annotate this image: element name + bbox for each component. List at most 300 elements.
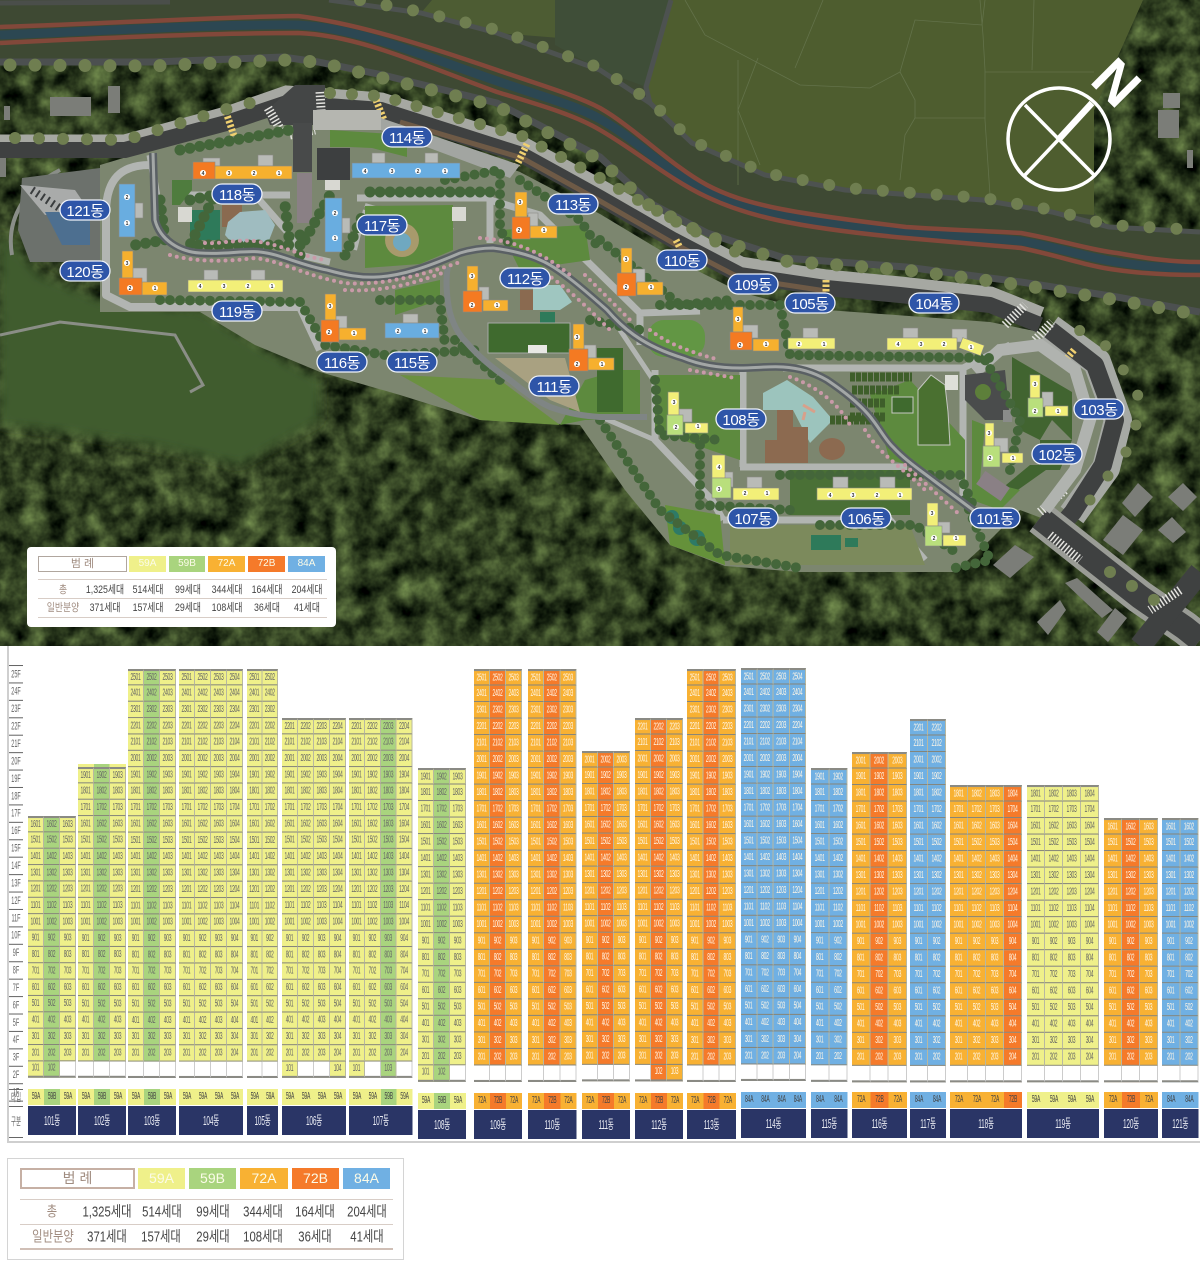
unit stack 111: 403 xyxy=(618,1017,625,1028)
unit stack 101: 1402 xyxy=(46,850,57,862)
unit stack 110: 2203 xyxy=(563,720,573,731)
unit stack 106: 303 xyxy=(318,1030,325,1042)
type and name 110동 xyxy=(528,1093,576,1139)
unit stack 112: 1001 xyxy=(637,918,648,929)
unit stack 104: 204 xyxy=(231,1047,238,1058)
unit stack 118: 601 xyxy=(955,985,962,996)
unit stack 114: 1603 xyxy=(776,818,786,830)
building 105 xyxy=(788,328,835,349)
unit stack 114: 2502 xyxy=(760,671,770,682)
unit stack 116: 1503 xyxy=(892,836,902,848)
unit stack 119: 601 xyxy=(1032,985,1039,996)
unit stack 111: 1403 xyxy=(616,852,627,863)
unit stack 115: 202 xyxy=(834,1050,842,1062)
unit stack 103: 2501 xyxy=(130,672,141,683)
label 105동 xyxy=(785,293,835,313)
unit stack 113: 802 xyxy=(707,951,715,963)
unit stack 110: 1901 xyxy=(531,770,541,781)
unit stack 106: 1401 xyxy=(284,850,295,862)
unit stack 106: 703 xyxy=(318,965,325,976)
unit stack 109: 2201 xyxy=(476,720,487,731)
unit stack 107: 1002 xyxy=(367,916,377,927)
unit stack 104: 1903 xyxy=(213,769,224,780)
unit stack 104: 1104 xyxy=(230,900,239,911)
unit stack 102: 603 xyxy=(114,981,121,992)
unit stack 109: 2403 xyxy=(508,687,519,698)
unit stack 104: 2502 xyxy=(197,672,208,683)
unit stack 120: 803 xyxy=(1145,952,1152,963)
unit stack 113: 2202 xyxy=(706,720,716,731)
type and name 120동: 72A xyxy=(1145,1094,1153,1105)
unit stack 119: 1602 xyxy=(1048,820,1059,831)
unit stack 105: 1302 xyxy=(265,867,275,878)
map legend header: 범 례 xyxy=(71,558,94,570)
unit stack 105: 1401 xyxy=(249,850,259,862)
unit stack 107: 804 xyxy=(400,949,408,960)
unit stack 111: 901 xyxy=(586,934,593,946)
unit stack 102: 803 xyxy=(114,948,121,960)
unit stack 114: 1702 xyxy=(760,802,770,813)
unit stack 104: 1302 xyxy=(197,867,208,878)
unit stack 112: 1101 xyxy=(638,901,647,913)
unit stack 109: 1401 xyxy=(476,852,487,864)
unit stack 109: 1502 xyxy=(492,836,503,847)
type and name 116동: 72A xyxy=(857,1094,865,1105)
unit stack 114: 1101 xyxy=(744,901,754,912)
unit stack 114: 903 xyxy=(777,934,785,945)
building 104: 1 xyxy=(970,345,973,351)
unit stack 108: 1402 xyxy=(436,852,447,864)
unit stack 106: 101 xyxy=(286,1063,293,1074)
unit stack 103: 501 xyxy=(132,998,139,1009)
unit stack 103: 1503 xyxy=(162,834,173,845)
unit stack 118: 1002 xyxy=(971,919,982,930)
unit stack 106: 1902 xyxy=(300,769,311,780)
bottom legend figures: 108세대 xyxy=(243,1230,283,1246)
unit stack 118: 404 xyxy=(1009,1018,1016,1029)
unit stack 103: 1903 xyxy=(162,769,173,780)
site plan aerial map xyxy=(0,0,1200,646)
unit stack 102: 801 xyxy=(82,948,89,960)
unit stack 113: 2303 xyxy=(722,704,732,715)
unit stack 111: 501 xyxy=(586,1000,593,1012)
unit stack 108: 1101 xyxy=(421,902,430,913)
unit stack 101: 1001 xyxy=(30,916,41,927)
unit stack 106: 1602 xyxy=(300,818,311,829)
unit stack 112: 1201 xyxy=(637,885,648,896)
bottom legend figures: 1,325세대 xyxy=(82,1204,132,1220)
unit stack 108: 201 xyxy=(422,1050,429,1062)
unit stack 108: 303 xyxy=(454,1034,461,1045)
yellow cap above unit stack 102 xyxy=(78,764,126,767)
unit stack 109: 1201 xyxy=(476,885,487,897)
unit stack 111: 1801 xyxy=(584,786,595,797)
unit stack 104: 1603 xyxy=(213,818,224,829)
building 114 xyxy=(352,153,460,178)
map legend figures: 157세대 xyxy=(133,602,163,614)
unit stack 106: 704 xyxy=(334,965,341,976)
unit stack 107: 1301 xyxy=(351,867,362,878)
unit stack 112: 2201 xyxy=(637,721,648,732)
unit stack 109: 503 xyxy=(510,1001,517,1012)
type and name 112동: 72A xyxy=(671,1095,679,1106)
unit stack 104: 1801 xyxy=(181,785,192,796)
unit stack 116: 1203 xyxy=(892,886,902,897)
unit stack 104: 903 xyxy=(215,932,222,944)
unit stack 104: 1304 xyxy=(229,867,240,878)
unit stack 115: 1901 xyxy=(815,771,825,782)
building 114: 4 xyxy=(364,169,367,175)
unit stack 118: 304 xyxy=(1009,1034,1016,1046)
unit stack 106: 1003 xyxy=(316,916,327,927)
unit stack 118: 904 xyxy=(1009,935,1016,947)
unit stack 117: 1401 xyxy=(913,853,924,864)
unit stack 114: 303 xyxy=(777,1033,785,1044)
unit stack 101: 201 xyxy=(32,1047,39,1058)
unit stack 112: 503 xyxy=(671,1000,678,1012)
unit stack 110: 203 xyxy=(564,1051,572,1062)
unit stack 106: 1104 xyxy=(333,899,342,911)
unit stack 102: 1501 xyxy=(80,834,91,845)
unit stack 106: 702 xyxy=(302,965,309,976)
floor labels: 17F xyxy=(11,807,21,819)
unit stack 109: 1901 xyxy=(476,770,487,781)
unit stack 119: 1601 xyxy=(1030,820,1041,831)
unit stack 119: 901 xyxy=(1032,935,1039,947)
type and name 106동: 59A xyxy=(286,1091,294,1102)
unit stack 104: 1004 xyxy=(229,916,240,927)
unit stack 103: 601 xyxy=(132,981,139,993)
unit stack 113: 1203 xyxy=(722,885,732,897)
unit stack 105: 2401 xyxy=(249,687,259,698)
unit stack 121: 1401 xyxy=(1166,853,1176,864)
floor labels: 1F xyxy=(13,1086,19,1098)
type and name 109동: 109동 xyxy=(490,1117,506,1132)
label 119동 xyxy=(212,301,262,321)
unit stack 109: 2402 xyxy=(492,687,503,698)
unit stack 109: 303 xyxy=(510,1034,517,1045)
unit stack 118: 1801 xyxy=(953,788,964,799)
unit stack 106: 1002 xyxy=(300,916,311,927)
unit stack 101: 603 xyxy=(64,981,71,992)
type and name 102동 xyxy=(78,1089,126,1135)
building 101: 1 xyxy=(955,536,958,542)
unit stack 101: 1603 xyxy=(62,819,73,830)
unit stack 119: 804 xyxy=(1086,952,1093,963)
unit stack 104: 702 xyxy=(199,965,206,976)
community green roof xyxy=(892,375,958,445)
unit stack 117: 801 xyxy=(915,952,922,963)
unit stack 103: 402 xyxy=(148,1014,155,1025)
unit stack 106: 1103 xyxy=(317,899,326,911)
type and name 106동 xyxy=(282,1089,346,1135)
unit stack 108: 1102 xyxy=(437,902,446,913)
unit stack 116: 1103 xyxy=(892,902,902,914)
unit stack 110: 2001 xyxy=(531,753,541,765)
unit stack 105: 2502 xyxy=(265,672,275,683)
unit stack 104: 402 xyxy=(199,1014,206,1025)
unit stack 113: 2502 xyxy=(706,672,716,683)
floor labels: 6F xyxy=(13,999,19,1011)
unit stack 106: 902 xyxy=(302,932,309,943)
north compass xyxy=(1008,46,1153,190)
label 116동 xyxy=(317,352,367,372)
unit stack 108: 401 xyxy=(422,1017,429,1029)
unit stack 121: 1601 xyxy=(1166,821,1176,832)
unit stack 112: 302 xyxy=(655,1033,662,1045)
unit stack 109: 1302 xyxy=(492,869,503,880)
unit stack 119: 302 xyxy=(1050,1034,1057,1046)
unit stack 112: 2001 xyxy=(637,753,648,764)
map legend figures: 371세대 xyxy=(90,602,120,614)
unit stack 116: 1901 xyxy=(856,770,866,781)
unit stack 112: 202 xyxy=(655,1050,662,1061)
floor labels: 14F xyxy=(11,859,21,872)
unit stack 108: 101 xyxy=(422,1066,429,1078)
unit stack 107: 1801 xyxy=(351,785,362,796)
unit stack 116: 703 xyxy=(894,968,901,980)
unit stack 113: 2103 xyxy=(722,737,732,748)
unit stack 109: 502 xyxy=(494,1001,501,1012)
unit stack 106: 1001 xyxy=(284,916,295,927)
unit stack 118: 303 xyxy=(991,1034,998,1046)
unit stack 103: 903 xyxy=(164,932,171,944)
unit stack 110: 901 xyxy=(532,935,539,946)
unit stack 105: 1201 xyxy=(249,883,259,894)
unit stack 120: 303 xyxy=(1145,1034,1152,1046)
building 104 xyxy=(887,328,984,356)
hillside lawn xyxy=(0,232,320,465)
type and name 107동: 59A xyxy=(353,1091,361,1102)
unit stack 104: 2201 xyxy=(181,720,192,731)
unit stack 103: 1303 xyxy=(162,867,173,878)
unit stack 119: 1403 xyxy=(1066,853,1077,864)
type and name 116동 xyxy=(852,1092,907,1138)
unit stack 107: 1504 xyxy=(399,834,409,845)
unit stack 106 xyxy=(282,718,346,1078)
unit stack 103: 1003 xyxy=(162,916,173,927)
unit stack 106: 1901 xyxy=(284,769,295,780)
floor labels: 21F xyxy=(11,737,21,750)
unit stack 113: 1803 xyxy=(722,786,732,798)
unit stack 102: 1801 xyxy=(80,785,91,796)
unit stack 111: 503 xyxy=(618,1000,625,1012)
unit stack 119: 603 xyxy=(1068,985,1075,996)
label 119동: 119동 xyxy=(219,304,256,321)
unit stack 116: 1102 xyxy=(874,902,884,914)
unit stack 111: 1101 xyxy=(585,901,594,913)
building 115: 2 xyxy=(397,329,400,335)
unit stack 119: 803 xyxy=(1068,952,1075,963)
unit stack 108: 1302 xyxy=(436,869,447,880)
unit stack 104: 704 xyxy=(231,965,238,976)
unit stack 108: 301 xyxy=(422,1034,429,1045)
building 117: 1 xyxy=(334,236,337,242)
unit stack 104: 203 xyxy=(215,1047,222,1058)
unit stack 118: 1301 xyxy=(953,869,964,881)
unit stack 108: 202 xyxy=(438,1050,445,1062)
unit stack 119: 1201 xyxy=(1030,886,1041,897)
unit stack 114: 1504 xyxy=(792,835,802,846)
building 108: 3 xyxy=(673,400,676,406)
unit stack 103: 803 xyxy=(164,949,171,960)
type and name 113동: 113동 xyxy=(704,1117,719,1132)
type and name 114동: 84A xyxy=(761,1094,770,1105)
unit stack 113: 402 xyxy=(707,1017,715,1029)
unit stack 107: 2204 xyxy=(399,721,409,732)
unit stack 103: 1902 xyxy=(146,769,157,780)
unit stack 107: 1202 xyxy=(367,883,377,894)
unit stack 112: 1303 xyxy=(669,868,680,880)
unit stack 114: 1001 xyxy=(744,917,754,929)
unit stack 105: 2402 xyxy=(265,687,275,698)
unit stack 106: 2002 xyxy=(300,752,311,764)
unit stack 118: 1103 xyxy=(990,902,999,914)
type and name 109동: 72B xyxy=(494,1095,502,1106)
map legend figures: 일반분양 xyxy=(47,602,79,614)
type and name 113동: 72A xyxy=(691,1095,699,1106)
unit stack 104: 1403 xyxy=(213,850,224,862)
unit stack 115: 1202 xyxy=(833,885,843,897)
building 104: 2 xyxy=(943,342,946,348)
unit stack 114: 302 xyxy=(761,1033,769,1044)
unit stack 114: 904 xyxy=(794,934,801,945)
building 114: 1 xyxy=(444,169,447,175)
unit stack 110: 803 xyxy=(564,951,572,963)
label 106동: 106동 xyxy=(847,511,885,528)
map legend panel xyxy=(27,547,336,627)
type and name 109동: 72A xyxy=(478,1095,486,1106)
unit stack 110: 2302 xyxy=(547,704,557,715)
unit stack 106: 801 xyxy=(286,949,293,960)
unit stack 119: 701 xyxy=(1032,968,1039,980)
unit stack 117: 402 xyxy=(933,1018,940,1029)
building 111: 3 xyxy=(576,335,579,341)
unit stack 104: 2101 xyxy=(181,736,192,747)
unit stack 101: 202 xyxy=(48,1047,55,1058)
unit stack 106: 1802 xyxy=(300,785,311,796)
unit stack 116: 701 xyxy=(857,968,864,980)
east outer road xyxy=(1050,330,1115,530)
unit stack 117: 2201 xyxy=(913,722,924,733)
unit stack 117: 1601 xyxy=(913,820,924,831)
unit stack 115: 1502 xyxy=(833,836,843,847)
unit stack 106: 501 xyxy=(286,998,293,1009)
unit stack 119: 303 xyxy=(1068,1034,1075,1046)
stream with red walkways xyxy=(0,16,1200,275)
gray utility buildings xyxy=(0,86,1197,642)
unit stack 113: 1301 xyxy=(690,869,700,880)
label 114동: 114동 xyxy=(389,130,426,147)
unit stack 109: 802 xyxy=(494,951,501,963)
unit stack 116: 902 xyxy=(875,935,883,947)
unit stack 114: 403 xyxy=(777,1016,785,1028)
unit stack 109: 1501 xyxy=(476,836,487,847)
unit stack 113: 2203 xyxy=(722,720,732,731)
type and name 104동: 104동 xyxy=(203,1113,219,1128)
unit stack 109: 903 xyxy=(510,935,517,946)
building 118: 3 xyxy=(228,171,231,177)
unit stack 113: 2301 xyxy=(690,704,700,715)
unit stack 104: 1501 xyxy=(181,834,192,845)
type and name 103동: 59A xyxy=(132,1091,140,1102)
unit stack 103: 2301 xyxy=(130,703,141,715)
unit stack 106: 1604 xyxy=(332,818,343,829)
unit stack 103 xyxy=(128,669,176,1078)
lawns xyxy=(172,130,1072,565)
unit stack 109: 1402 xyxy=(492,852,503,864)
unit stack 114: 1203 xyxy=(776,884,786,896)
unit stack 119: 1304 xyxy=(1084,869,1095,881)
unit stack 107: 2004 xyxy=(399,752,409,764)
unit stack 119: 1603 xyxy=(1066,820,1077,831)
unit stack 106: 1303 xyxy=(316,867,327,878)
type and name 103동: 59B xyxy=(148,1091,156,1102)
unit stack 110: 201 xyxy=(532,1051,539,1062)
unit stack 114 xyxy=(741,668,806,1081)
building 119: 4 xyxy=(199,284,202,290)
unit stack 105 xyxy=(247,669,278,1078)
label 117동 xyxy=(357,215,407,235)
unit stack 104: 1902 xyxy=(197,769,208,780)
unit stack 109: 1701 xyxy=(476,803,487,814)
unit stack 105: 801 xyxy=(250,949,258,960)
type and name 109동: 72A xyxy=(510,1095,518,1106)
unit stack 118: 1401 xyxy=(953,853,964,864)
unit stack 107: 2104 xyxy=(399,736,409,747)
unit stack 117: 1402 xyxy=(931,853,942,864)
unit stack 119: 1301 xyxy=(1030,869,1041,881)
unit stack 110: 2501 xyxy=(531,672,541,683)
floor labels: 25F xyxy=(11,668,21,680)
unit stack 104: 2202 xyxy=(197,720,208,731)
floor labels: 10F xyxy=(11,929,21,941)
unit stack 104: 1504 xyxy=(229,834,240,845)
unit stack 118: 1803 xyxy=(989,788,1000,799)
building 118 xyxy=(193,155,292,179)
unit stack 105: 1702 xyxy=(265,801,275,813)
floor labels: 16F xyxy=(11,824,21,837)
type and name 106동: 106동 xyxy=(306,1113,322,1128)
unit stack 114: 1102 xyxy=(760,901,770,912)
unit stack 106: 2102 xyxy=(300,736,311,747)
type and name 117동: 117동 xyxy=(920,1116,936,1131)
unit stack 103: 802 xyxy=(148,949,155,960)
unit stack 119: 504 xyxy=(1086,1001,1093,1013)
unit stack 106: 1704 xyxy=(332,801,343,813)
unit stack 113: 1403 xyxy=(722,852,732,864)
building 111 xyxy=(569,324,614,371)
floor labels: 22F xyxy=(11,720,21,732)
unit stack 120: 1101 xyxy=(1108,902,1117,914)
label 109동 xyxy=(728,274,778,294)
unit stack 104: 2504 xyxy=(229,672,240,683)
unit stack 113: 1103 xyxy=(722,902,732,913)
unit stack 110: 1102 xyxy=(547,902,557,913)
unit stack 110: 1701 xyxy=(531,803,541,814)
unit stack 119: 202 xyxy=(1050,1051,1057,1062)
unit stack 107: 504 xyxy=(400,998,408,1009)
unit stack 114: 304 xyxy=(794,1033,801,1044)
legend swatch 72A: 72A xyxy=(252,1170,276,1186)
swatch 59A xyxy=(129,556,166,572)
unit stack 104: 1802 xyxy=(197,785,208,796)
swatch 59B xyxy=(169,556,205,572)
unit stack 109: 2002 xyxy=(492,753,503,765)
unit stack 104: 2302 xyxy=(197,703,208,715)
unit stack 104: 1203 xyxy=(213,883,224,894)
unit stack 106: 503 xyxy=(318,998,325,1009)
